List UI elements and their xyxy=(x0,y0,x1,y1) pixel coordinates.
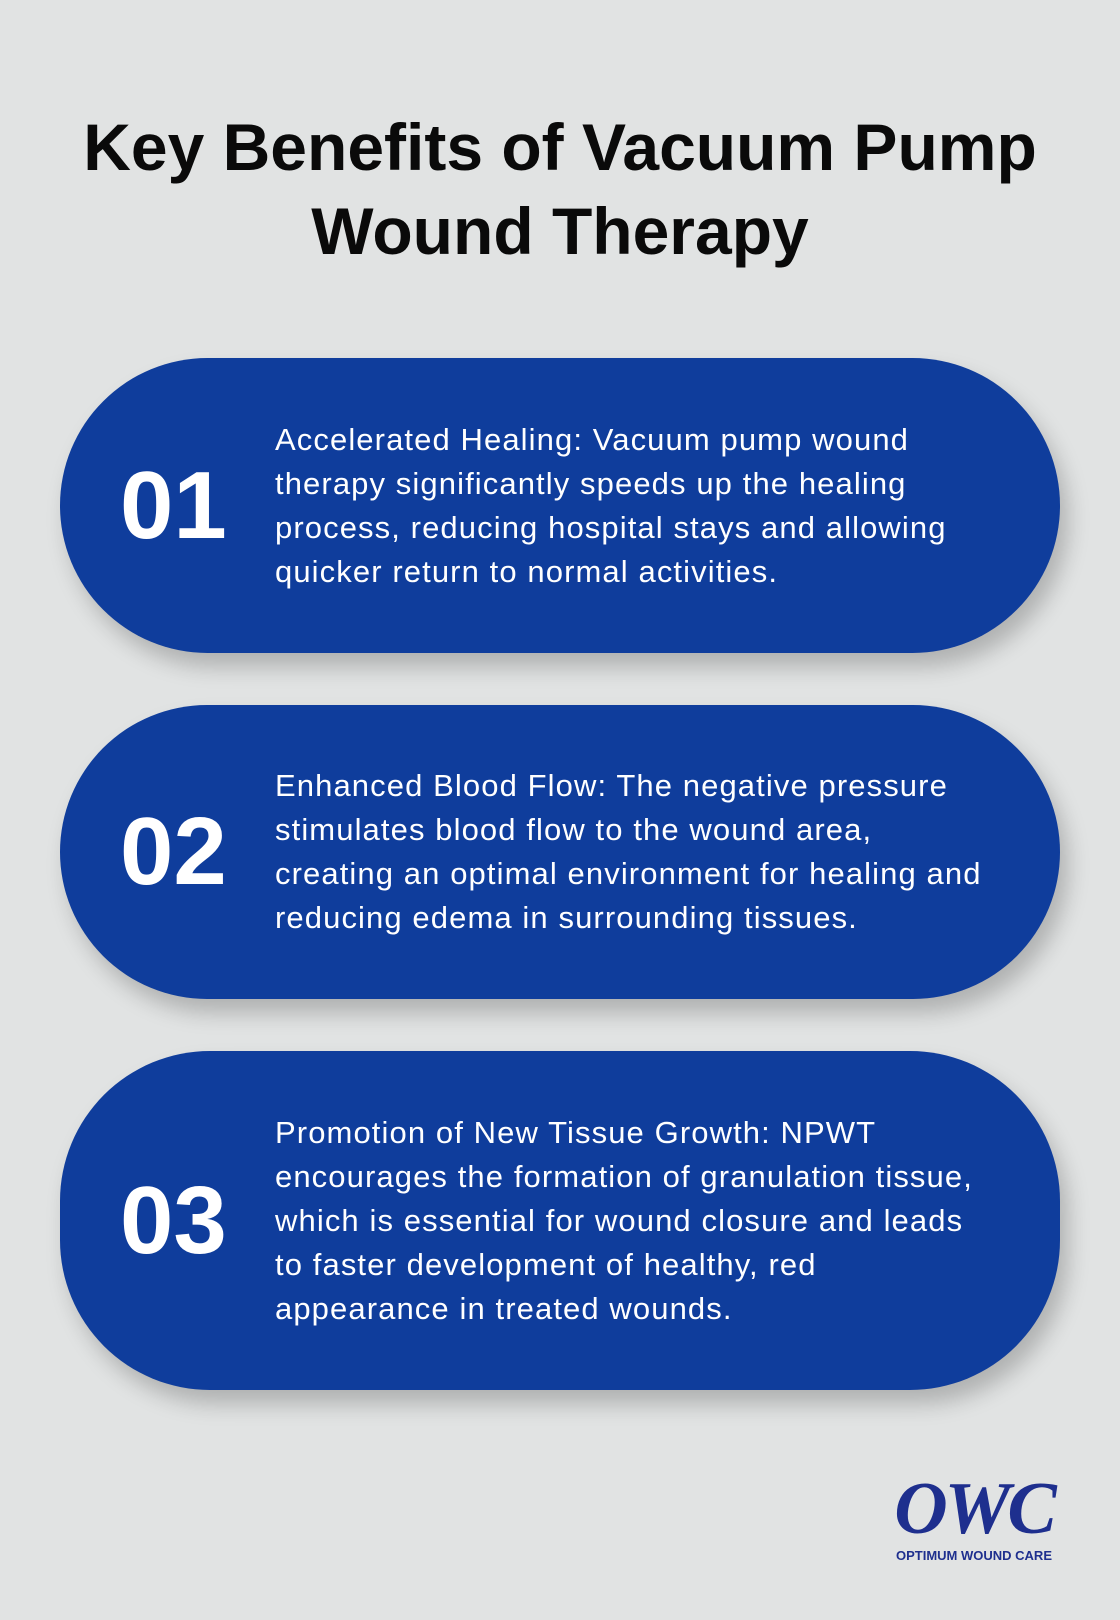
text: new tissue growth: appearance in treated wounds. xyxy=(275,1290,733,1326)
text: enhanced blood flow: Enhanced Blood Flow: The negative pressure xyxy=(275,768,948,803)
logo: OPTIMUM WOUND CARE xyxy=(896,1548,1052,1563)
text: accelerated healing xyxy=(275,422,947,588)
panel: benefit 02 xyxy=(60,705,1060,999)
text: accelerated healing: therapy significantly speeds up the healing xyxy=(275,466,907,500)
text: new tissue growth: Promotion of New Tissue Growth: NPWT xyxy=(275,1114,876,1150)
panel: benefit 01 xyxy=(60,358,1060,653)
title: Key Benefits of Vacuum Pump xyxy=(83,110,1037,184)
text: new tissue growth xyxy=(275,1114,973,1326)
number 02: 02 xyxy=(120,798,227,905)
text: enhanced blood flow: reducing edema in surrounding tissues. xyxy=(275,900,858,935)
text: enhanced blood flow xyxy=(275,768,982,935)
number 01: 01 xyxy=(120,452,227,558)
title: Wound Therapy xyxy=(311,194,809,268)
text: accelerated healing: quicker return to normal activities. xyxy=(275,554,778,588)
title xyxy=(83,110,1037,268)
text: new tissue growth: which is essential for wound closure and leads xyxy=(275,1202,963,1238)
text: new tissue growth: to faster development of healthy, red xyxy=(275,1246,817,1282)
text: new tissue growth: encourages the formation of granulation tissue, xyxy=(275,1158,973,1194)
text: accelerated healing: process, reducing hospital stays and allowing xyxy=(275,510,947,544)
text: enhanced blood flow: creating an optimal environment for healing and xyxy=(275,856,982,891)
text: enhanced blood flow: stimulates blood flow to the wound area, xyxy=(275,812,872,847)
number 03: 03 xyxy=(120,1166,227,1274)
logo: OWC xyxy=(894,1468,1054,1550)
text: accelerated healing: Accelerated Healing: Vacuum pump wound xyxy=(275,422,909,456)
panel: benefit 03 xyxy=(60,1051,1060,1390)
